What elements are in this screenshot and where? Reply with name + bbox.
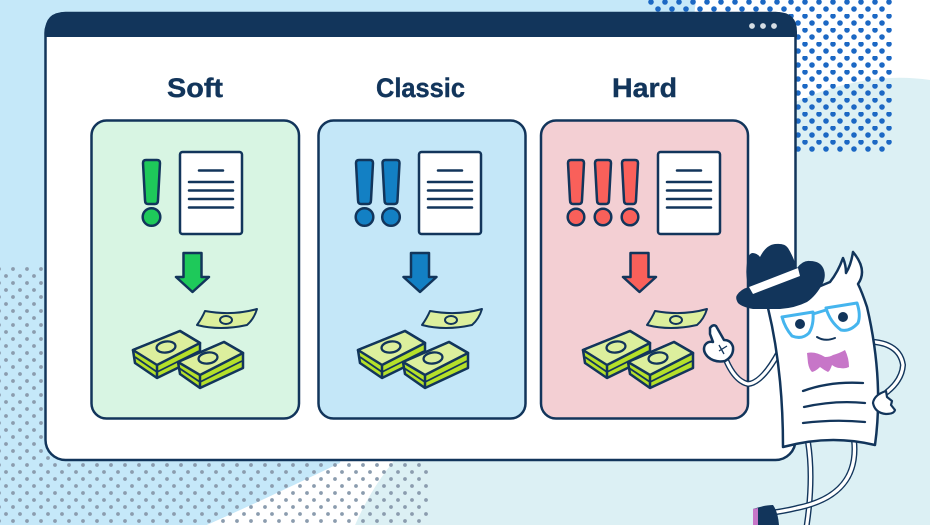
panel: Soft — [92, 120, 299, 418]
halftone: grey dots — [0, 265, 429, 525]
arms — [726, 342, 903, 392]
browser window — [45, 12, 797, 460]
icon: document — [658, 152, 720, 234]
heading: Hard: Hard — [612, 73, 677, 103]
body — [768, 252, 878, 447]
hand: on hip — [873, 391, 895, 414]
background: white wedge — [207, 440, 400, 525]
panel: Classic — [318, 120, 526, 418]
arrow — [623, 253, 656, 292]
shoe — [753, 505, 779, 525]
arrow — [176, 253, 209, 292]
heading: Classic: Classic — [376, 73, 465, 103]
icon: money — [133, 309, 257, 388]
body text lines — [803, 383, 865, 423]
window title bar — [45, 12, 797, 37]
hat band — [749, 268, 800, 294]
icon: document — [180, 152, 242, 234]
legs — [770, 440, 855, 525]
bow tie — [807, 350, 849, 372]
hat — [736, 244, 825, 309]
hand: pointing — [704, 325, 733, 362]
icon: two exclamation marks — [356, 160, 400, 226]
character: paper mascot — [704, 244, 903, 525]
halftone: blue dots — [648, 0, 893, 152]
heading: Soft: Soft — [167, 73, 223, 103]
icon: three exclamation marks — [568, 160, 638, 225]
window dots — [749, 23, 777, 29]
glasses — [782, 303, 859, 337]
background: light blue shape — [0, 0, 700, 525]
icon: money — [358, 309, 482, 388]
smile — [817, 337, 835, 340]
eyes — [795, 319, 805, 329]
panel: Hard — [541, 120, 748, 418]
icon: exclamation mark — [143, 160, 160, 226]
icon: money — [583, 309, 707, 388]
arrow — [404, 253, 436, 292]
icon: document — [419, 152, 481, 234]
background: pale teal shape — [355, 78, 930, 525]
